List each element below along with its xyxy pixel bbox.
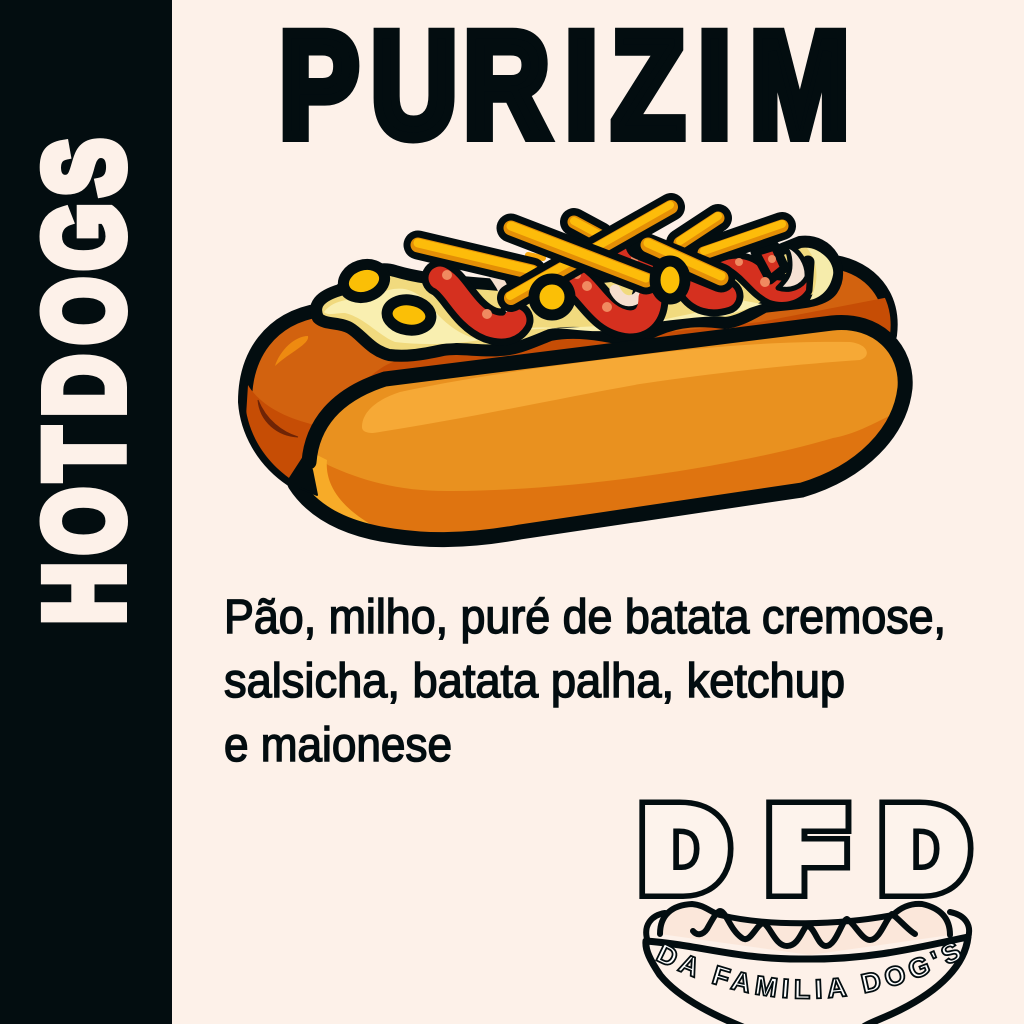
rear bun xyxy=(240,262,900,510)
left sidebar xyxy=(0,0,172,1024)
title: PURIZIM: PURIZIM xyxy=(279,1,850,169)
logo hot dog xyxy=(646,904,969,1024)
ketchup spots xyxy=(442,254,776,319)
ketchup zigzag xyxy=(440,255,725,327)
mashed potato highlights xyxy=(324,289,762,344)
logo letters DFD: F xyxy=(770,787,844,912)
mashed potato xyxy=(316,242,837,356)
front bun xyxy=(290,300,930,540)
potato straws xyxy=(418,205,782,298)
logo: DFD Da Familia Dog's xyxy=(639,787,974,1024)
logo letters DFD: D xyxy=(883,787,967,912)
line 3: e maionese xyxy=(224,719,452,772)
hot dog illustration xyxy=(240,205,930,540)
sidebar label: HOTDOGS: HOTDOGS xyxy=(23,139,145,624)
logo letters DFD xyxy=(643,787,967,912)
logo letters DFD: D xyxy=(643,787,727,912)
line 1: Pão, milho, puré de batata cremose, xyxy=(224,591,946,644)
logo tagline: DA FAMILIA DOG'S xyxy=(655,943,960,1000)
line 2: salsicha, batata palha, ketchup xyxy=(224,655,845,708)
description text xyxy=(224,591,946,772)
logo letters DFD: F xyxy=(770,787,844,912)
corn kernels xyxy=(339,259,685,333)
logo letters DFD: D xyxy=(643,787,727,912)
ketchup right swirl with cream xyxy=(720,245,833,302)
logo letters DFD: D xyxy=(883,787,967,912)
